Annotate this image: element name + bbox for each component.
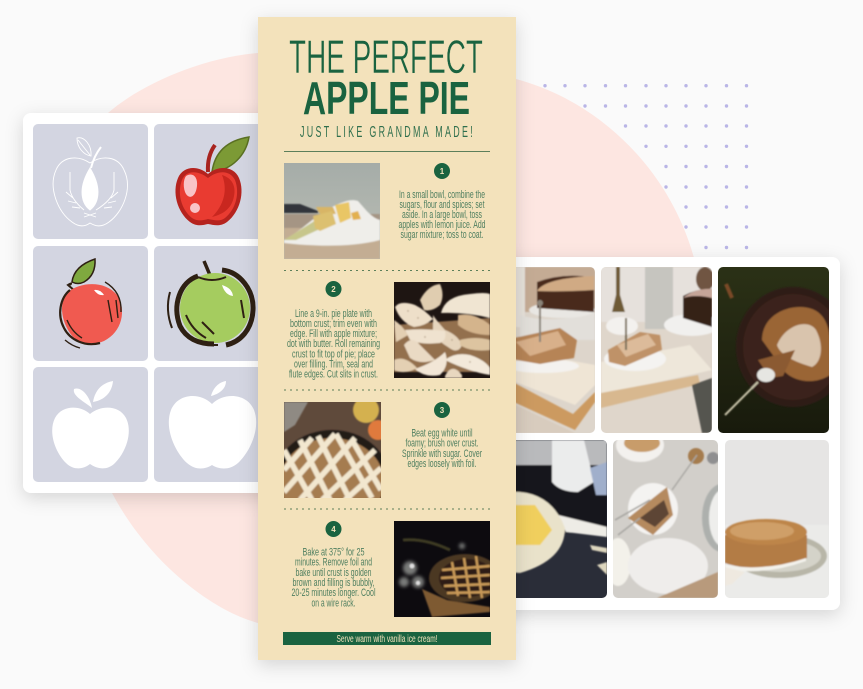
dot grid [543,84,748,249]
step 4: 20-25 minutes longer. Cool [292,587,376,599]
icon: white round apple silhouette [169,381,256,468]
title: JUST LIKE GRANDMA MADE! [300,124,475,141]
tile backgrounds [33,124,269,482]
footer banner: Serve warm with vanilla ice cream! [336,634,438,645]
photo: sliced apples [394,282,490,378]
step 4: 4 [331,525,336,534]
step 2: 2 [331,285,336,294]
step 1: 1 [440,167,445,176]
step 3: 3 [440,406,445,415]
step 4 [292,521,376,610]
step 2: flute edges. Cut slits in crust. [289,368,378,380]
icon: glossy red apple [175,137,249,225]
photo: baked pie on dark table [394,521,490,617]
step 2: edge. Fill with apple mixture; [290,328,377,340]
panel: recipe poster [258,17,516,660]
panel: apple icon set [23,113,283,493]
step 3: foamy; brush over crust. [406,438,478,450]
icon: sketched green apple [168,261,253,345]
photo: whole apple cake [725,440,829,598]
title [289,30,483,141]
photo: lattice pie [284,402,381,498]
photo: pie slices on table [601,267,720,433]
step 4: on a wire rack. [312,598,356,610]
title: THE PERFECT [289,30,483,83]
step 2 [287,281,380,380]
step 2: crust to fit top of pie; place [292,348,375,360]
step 3: edges loosely with foil. [408,458,476,470]
step 2: bottom crust; trim even with [290,318,377,330]
icon: white apple silhouette with leaf [52,381,129,468]
step 1 [398,163,486,241]
title rule [284,151,490,152]
step 1: apples with lemon juice. Add [398,219,486,231]
step 4: Bake at 375° for 25 [302,546,364,558]
step 3: Beat egg white until [412,428,472,440]
title: APPLE PIE [303,72,470,124]
step 2: Line a 9-in. pie plate with [295,308,372,320]
photo: pie slice on book [516,267,595,433]
step 2: dot with butter. Roll remaining [287,338,380,350]
step 3: Sprinkle with sugar. Cover [402,448,482,460]
step 4: bake until crust is golden [296,567,372,579]
footer banner [283,632,491,645]
panel: pie photo gallery [490,257,850,610]
step 1: sugar mixture; toss to coat. [400,229,484,241]
step 1: aside. In a large bowl, toss [402,209,482,221]
step 4: minutes. Remove foil and [295,556,372,568]
step 4: brown and filling is bubbly, [292,577,374,589]
step 1: sugars, flour and spices; set [400,199,484,211]
step 2: over filling. Trim, seal and [294,358,373,370]
photo: galette on dark plate [718,267,829,433]
icon: sketched red apple [60,259,122,348]
step 1: In a small bowl, combine the [399,189,485,201]
icon: outline apple with leaf [53,138,127,226]
step 3 [402,402,482,470]
photo: raw pie in kitchen [516,440,607,598]
photo: flat lay with floured table [613,440,718,598]
photo: flour and butter [284,163,380,259]
background blob [108,53,694,623]
